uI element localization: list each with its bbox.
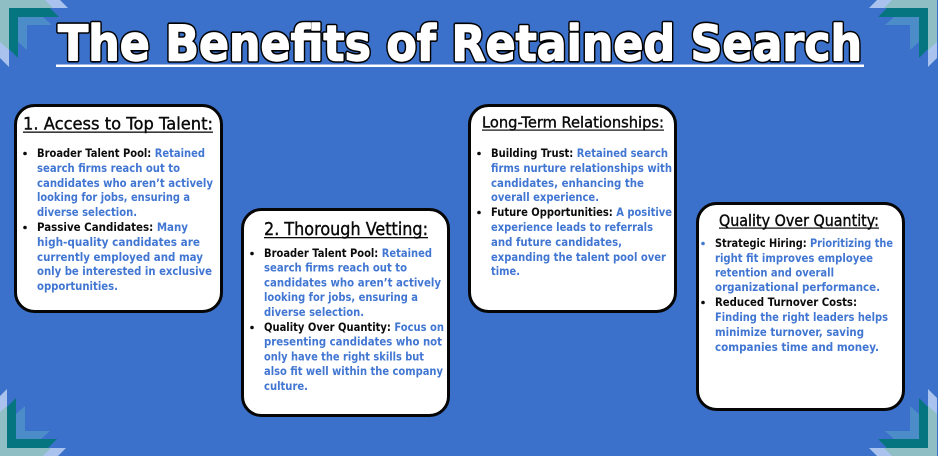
text block: quality over quantity: presenting candidates who not — [264, 334, 442, 348]
heading: thorough vetting: 2. Thorough Vetting: — [264, 220, 428, 240]
text block: broader talent pool: candidates who aren’t actively — [264, 276, 441, 290]
text block: building trust: firms nurture relationships with — [491, 161, 672, 175]
text block: strategic hiring: right fit improves employee — [715, 251, 873, 265]
text block: strategic hiring: retention and overall — [715, 266, 834, 280]
text block: strategic hiring — [701, 236, 893, 294]
icon: bottom-left corner chevrons — [0, 389, 66, 456]
panel: access to top talent — [16, 106, 222, 312]
panel: long-term relationships — [470, 106, 676, 312]
text block: future opportunities — [477, 205, 672, 278]
text block: passive candidates: high-quality candidates are — [37, 235, 200, 249]
text block: reduced turnover costs: Reduced Turnover Costs: — [715, 295, 857, 309]
text block: broader talent pool: search firms reach out to — [37, 161, 180, 175]
text block: broader talent pool: diverse selection. — [37, 205, 137, 219]
text block: passive candidates: only be interested in exclusive — [37, 264, 212, 278]
text block: future opportunities: experience leads to referrals — [491, 220, 653, 234]
icon: top-left corner chevrons — [0, 0, 68, 67]
text block: reduced turnover costs: Finding the right leaders helps — [715, 310, 888, 324]
text block: future opportunities: Future Opportunities: A positive — [491, 205, 672, 219]
text block: broader talent pool: Broader Talent Pool: Retained — [264, 246, 432, 260]
text block: quality over quantity: culture. — [264, 379, 308, 393]
panel: quality over quantity — [698, 204, 904, 410]
text block: passive candidates: Passive Candidates: Many — [37, 220, 188, 234]
text block: broader talent pool: diverse selection. — [264, 305, 364, 319]
text block: passive candidates: currently employed and may — [37, 250, 203, 264]
text block: strategic hiring: organizational performance. — [715, 280, 880, 294]
icon: top-right corner chevrons — [869, 0, 937, 67]
text block: broader talent pool: candidates who aren’t actively — [37, 176, 213, 190]
text block: broader talent pool — [250, 246, 441, 319]
title: The Benefits of Retained Search — [58, 16, 862, 72]
text block: future opportunities: expanding the talent pool over — [491, 250, 666, 264]
text block: reduced turnover costs: minimize turnover, saving — [715, 325, 864, 339]
title: The Benefits of Retained Search — [58, 16, 862, 72]
text block: broader talent pool: search firms reach out to — [264, 260, 407, 274]
text block: quality over quantity: Quality Over Quantity: Focus on — [264, 320, 444, 334]
text block: broader talent pool: looking for jobs, ensuring a — [37, 190, 190, 204]
panel: thorough vetting — [242, 210, 448, 416]
text block: building trust — [477, 146, 672, 204]
heading: access to top talent: 1. Access to Top Talent: — [23, 114, 213, 134]
text block: reduced turnover costs — [701, 295, 888, 354]
icon: bottom-right corner chevrons — [869, 389, 937, 456]
text block: quality over quantity — [250, 320, 444, 393]
text block: building trust: overall experience. — [491, 190, 599, 204]
text block: broader talent pool: Broader Talent Pool: Retained — [37, 146, 205, 160]
text block: reduced turnover costs: companies time and money. — [715, 340, 879, 354]
text block: strategic hiring: Strategic Hiring: Prioritizing the — [715, 236, 893, 250]
text block: building trust: Building Trust: Retained search — [491, 146, 668, 160]
heading: long-term relationships: Long-Term Relationships: — [482, 114, 664, 132]
text block: broader talent pool: looking for jobs, ensuring a — [264, 290, 418, 304]
text block: passive candidates: opportunities. — [37, 279, 118, 293]
text block: future opportunities: and future candidates, — [491, 235, 622, 249]
text block: quality over quantity: only have the right skills but — [264, 350, 424, 364]
text block: broader talent pool — [23, 146, 213, 219]
text block: passive candidates — [23, 220, 212, 293]
text block: building trust: candidates, enhancing the — [491, 176, 644, 190]
text block: future opportunities: time. — [491, 264, 520, 278]
heading: quality over quantity: Quality Over Quantity: — [719, 211, 879, 230]
text block: quality over quantity: also fit well within the company — [264, 364, 443, 378]
